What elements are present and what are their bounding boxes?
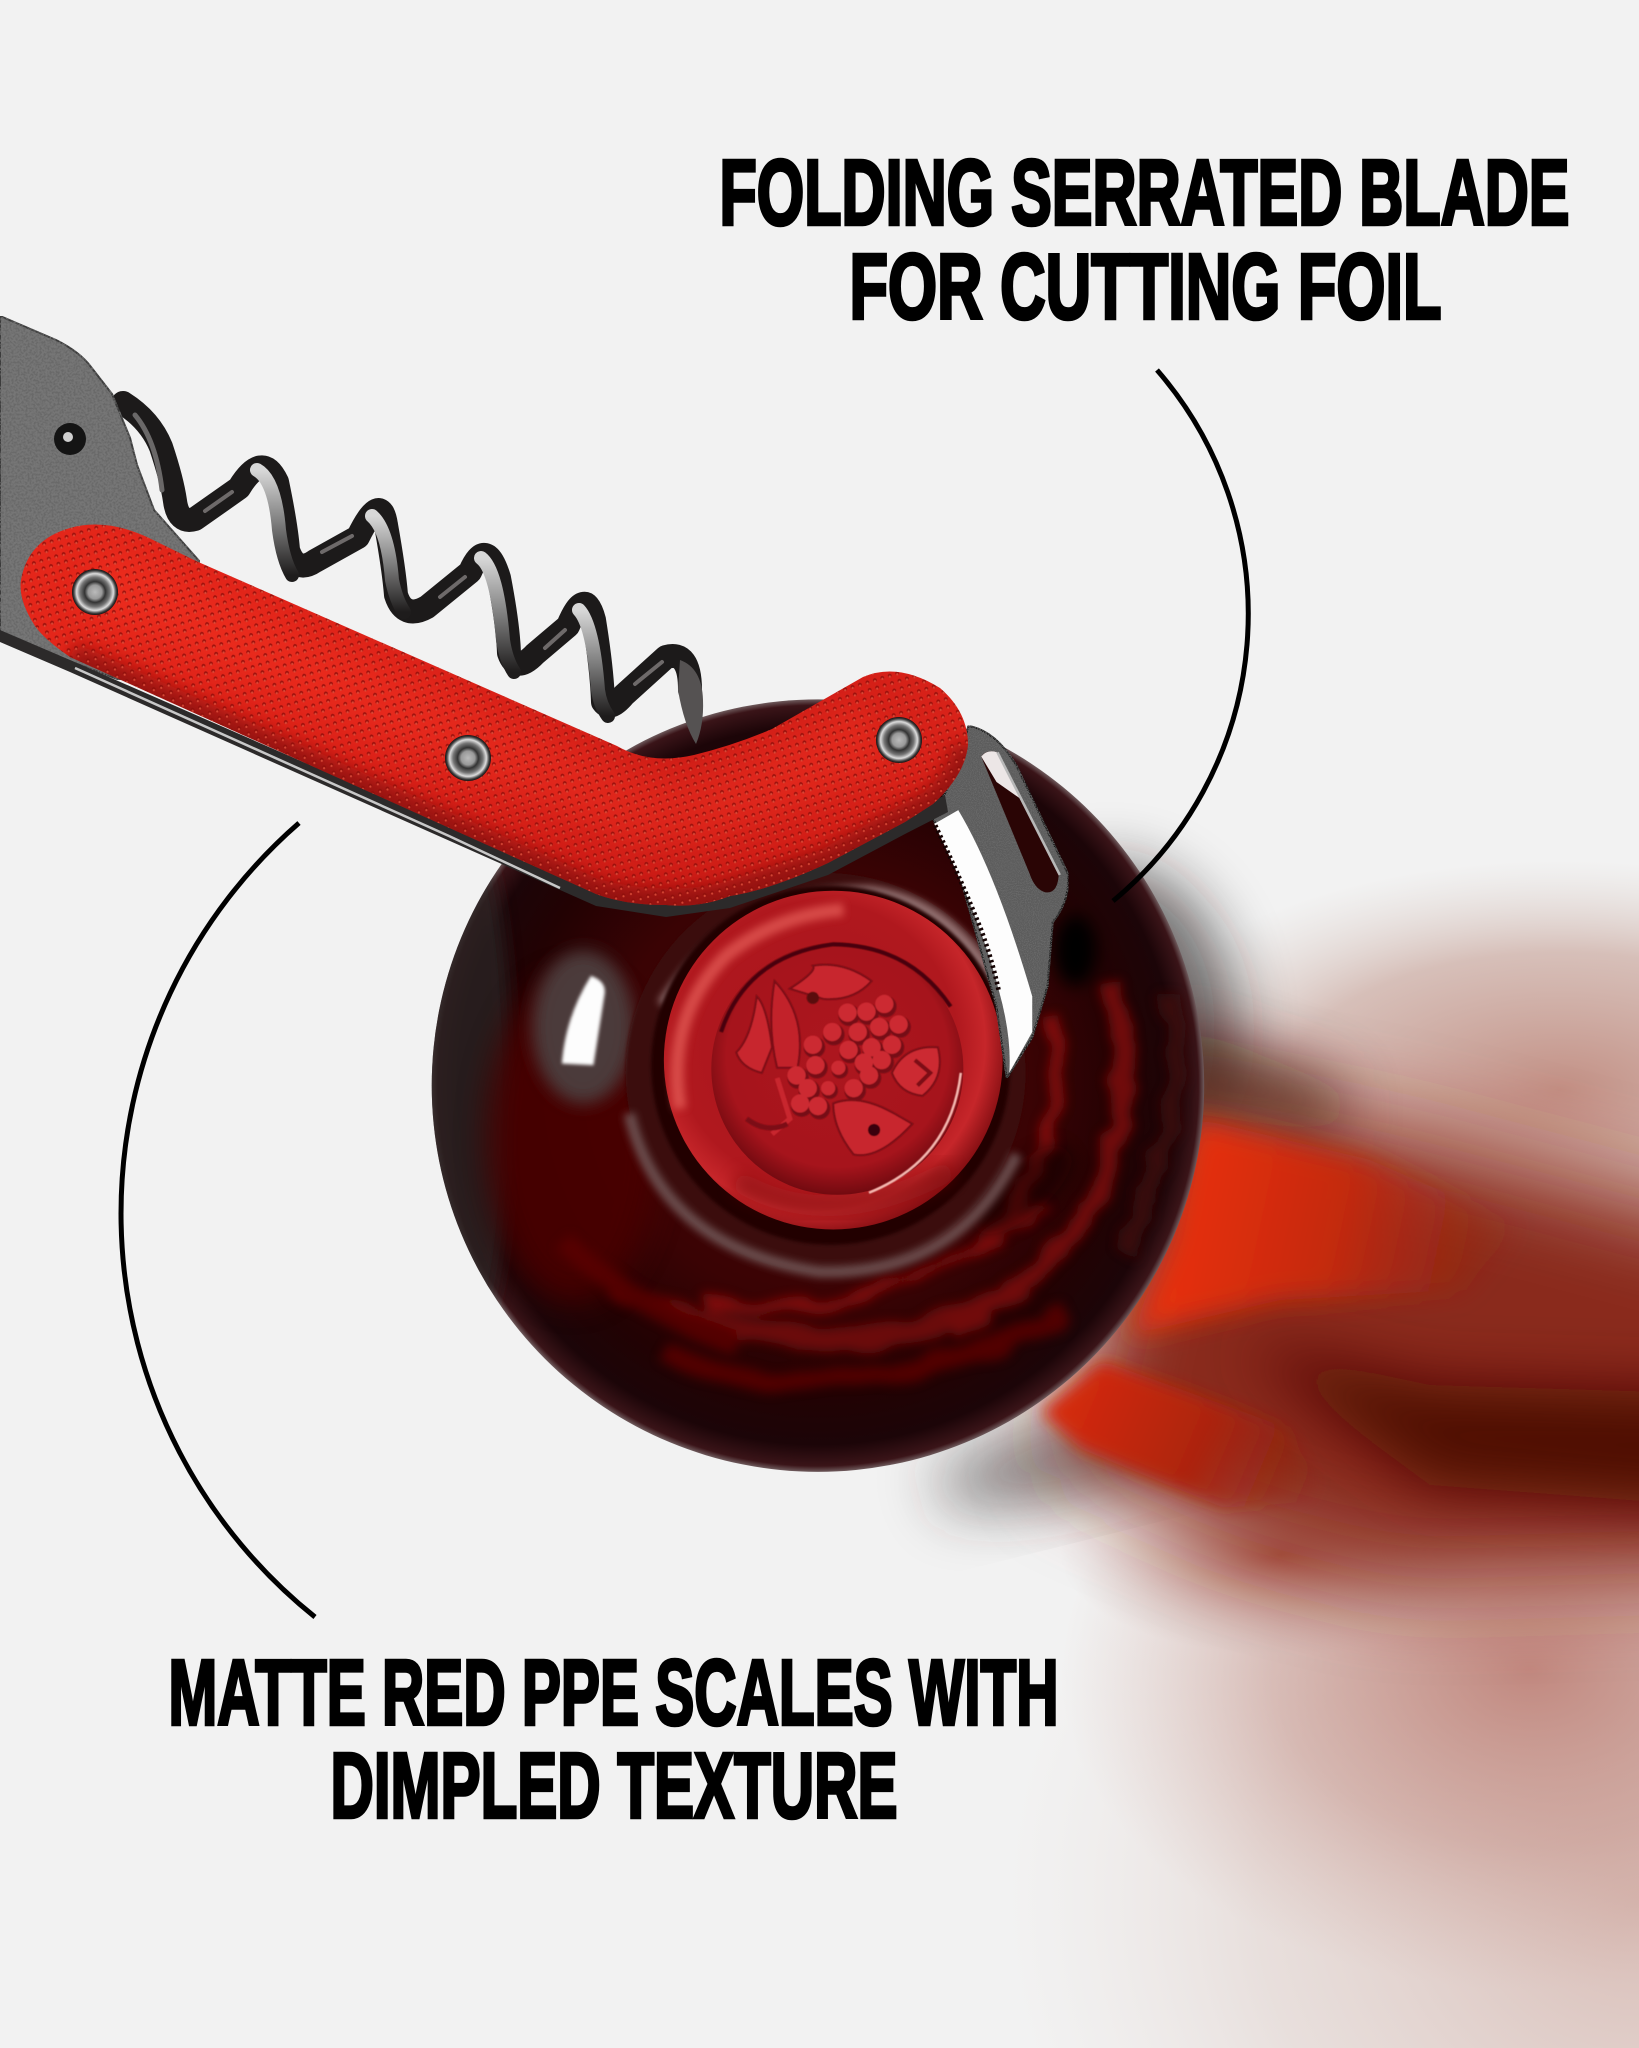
heading: matte red scales <box>168 1640 1058 1838</box>
heading: matte red scales: DIMPLED TEXTURE <box>330 1734 898 1838</box>
rivet on metal body <box>54 423 86 455</box>
heading: folding serrated blade <box>720 140 1570 338</box>
handle rivets <box>72 569 922 781</box>
callout arc: handle scales <box>121 823 315 1617</box>
corkscrew tip <box>678 660 703 744</box>
metal tool body <box>0 316 948 917</box>
cast shadow and red light <box>900 840 1639 2048</box>
wine bottle with seal and folding blade <box>420 699 1204 1472</box>
red foil capsule <box>664 891 1003 1229</box>
bottle glass <box>420 699 1204 1472</box>
red dimpled handle <box>20 524 968 906</box>
wax seal <box>711 943 963 1195</box>
grape emboss <box>736 965 940 1155</box>
serrated blade <box>934 810 1032 1073</box>
bottle neck ring <box>626 873 1026 1273</box>
heading: matte red scales: MATTE RED PPE SCALES WITH <box>168 1640 1058 1744</box>
corkscrew worm <box>123 403 703 744</box>
lower metal rim <box>0 630 948 917</box>
callout arc: blade <box>1113 370 1248 901</box>
corkscrew foil knife tool <box>933 726 1068 1078</box>
glass reflection <box>532 950 634 1103</box>
